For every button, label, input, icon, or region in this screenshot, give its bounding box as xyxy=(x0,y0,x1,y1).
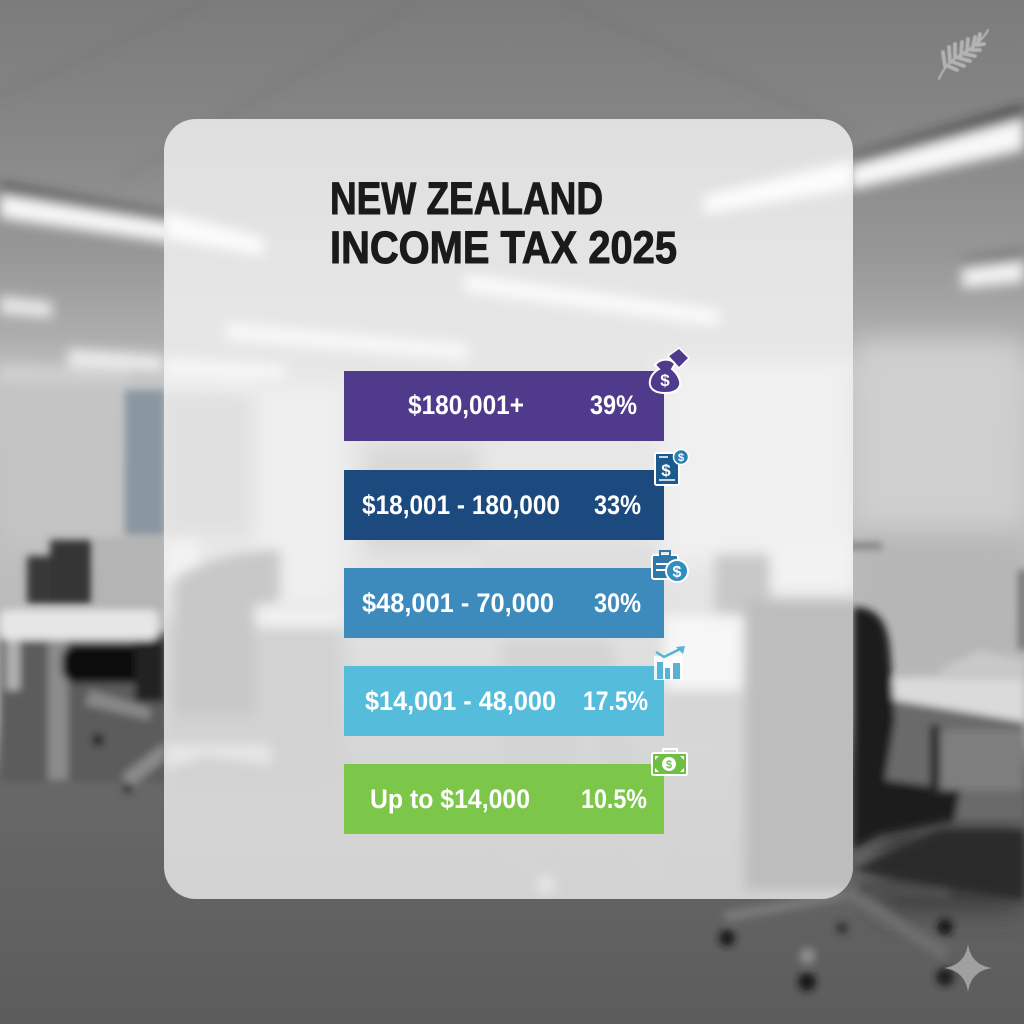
office furniture, left xyxy=(0,390,170,793)
icon: briefcase with coin: $ xyxy=(673,564,682,581)
tax bracket: $180,001+ at 39% xyxy=(344,371,664,441)
ceiling lights xyxy=(0,106,1024,384)
icon: silver fern xyxy=(939,30,988,79)
title xyxy=(330,173,677,273)
tax bracket: $48,001 - 70,000 at 30% xyxy=(344,568,664,638)
tax bracket: Up to $14,000 at 10.5%: 10.5% xyxy=(581,784,647,814)
tax bracket: $48,001 - 70,000 at 30%: 30% xyxy=(594,588,641,618)
office furniture, right xyxy=(719,543,1024,991)
icon: banknote case xyxy=(652,749,687,775)
tax bracket: Up to $14,000 at 10.5% xyxy=(344,764,664,834)
title: NEW ZEALAND xyxy=(330,173,603,224)
title: INCOME TAX 2025 xyxy=(330,222,677,273)
tax bracket: $48,001 - 70,000 at 30%: $48,001 - 70,000 xyxy=(362,588,554,618)
tax bracket: $180,001+ at 39%: $180,001+ xyxy=(408,390,524,420)
icon: clipboard with coin: $ xyxy=(678,452,684,464)
icon: rising bar chart xyxy=(654,646,685,680)
ceiling panel seams xyxy=(0,0,860,180)
tax bracket: Up to $14,000 at 10.5%: Up to $14,000 xyxy=(370,784,530,814)
tax bracket: $180,001+ at 39%: 39% xyxy=(590,390,637,420)
icon: clipboard with coin xyxy=(655,450,688,485)
tax bracket: $14,001 - 48,000 at 17.5%: $14,001 - 48,000 xyxy=(365,686,556,716)
tax bracket: $18,001 - 180,000 at 33% xyxy=(344,470,664,540)
icon: clipboard with coin: $ xyxy=(661,461,671,480)
icon: sparkle xyxy=(944,944,992,992)
tax bracket: $18,001 - 180,000 at 33%: $18,001 - 180,000 xyxy=(362,490,560,520)
tax bracket: $18,001 - 180,000 at 33%: 33% xyxy=(594,490,641,520)
icon: briefcase with coin xyxy=(652,551,688,582)
tax bracket: $14,001 - 48,000 at 17.5% xyxy=(344,666,664,736)
icon: money bag: $ xyxy=(660,371,670,390)
tax bracket: $14,001 - 48,000 at 17.5%: 17.5% xyxy=(583,686,648,716)
icon: money bag xyxy=(650,348,689,393)
icon: banknote case: $ xyxy=(666,759,672,771)
panel: frosted card xyxy=(128,119,865,899)
